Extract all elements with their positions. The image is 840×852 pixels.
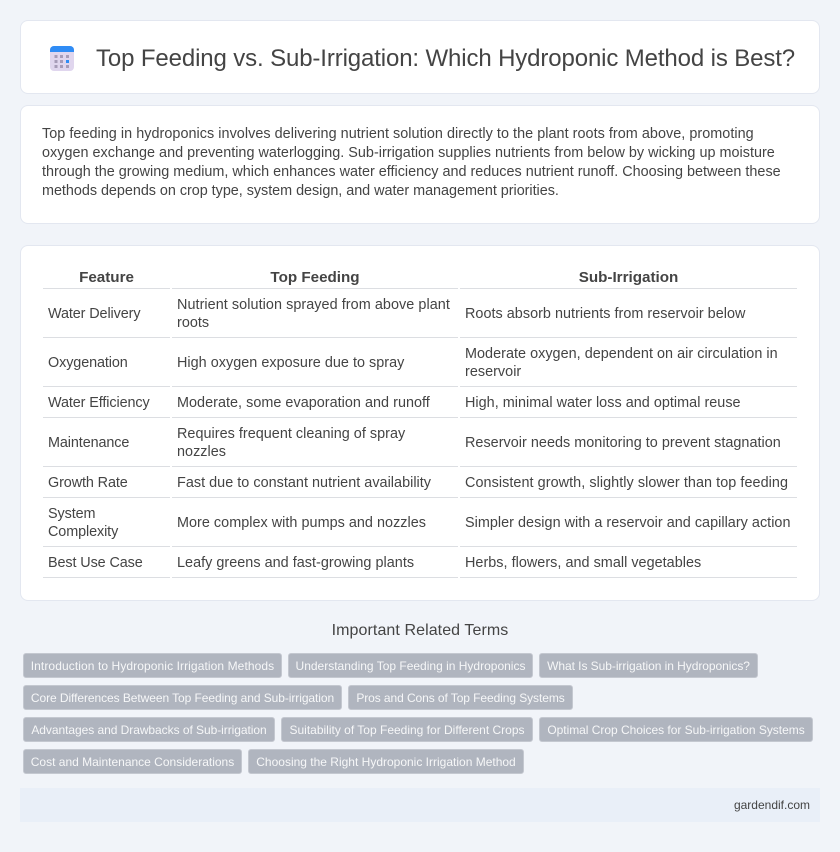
intro text: methods depends on crop type, system design, and water management priorities. xyxy=(42,183,559,199)
row: best use case: Best Use Case xyxy=(48,555,143,571)
row: maintenance: nozzles xyxy=(177,444,226,460)
row: water delivery: Water Delivery xyxy=(48,306,140,322)
related terms tags: Choosing the Right Hydroponic Irrigation Method xyxy=(256,755,516,769)
row: best use case: Leafy greens and fast-growing plants xyxy=(177,555,414,571)
related terms tags: Introduction to Hydroponic Irrigation Methods xyxy=(31,659,274,673)
intro text: through the growing medium, which enhances water efficiency and reduces nutrient runoff. Choosing between these xyxy=(42,164,781,180)
row: oxygenation xyxy=(48,346,778,380)
row: maintenance: Maintenance xyxy=(48,435,129,451)
comparison table xyxy=(43,269,797,578)
panel: comparison table xyxy=(20,245,820,601)
row: water delivery xyxy=(48,297,746,331)
row: water efficiency: Moderate, some evaporation and runoff xyxy=(177,395,430,411)
row: oxygenation: Oxygenation xyxy=(48,355,128,371)
related terms tags: Core Differences Between Top Feeding and Sub-irrigation xyxy=(31,691,334,705)
intro text: oxygen exchange and preventing waterlogging. Sub-irrigation supplies nutrients from below by wicking up moisture xyxy=(42,145,775,161)
row: best use case xyxy=(48,555,701,571)
related terms tags: Understanding Top Feeding in Hydroponics xyxy=(296,659,525,673)
row: water efficiency: Water Efficiency xyxy=(48,395,150,411)
row: system complexity: Simpler design with a reservoir and capillary action xyxy=(465,515,790,531)
row: water delivery: Nutrient solution sprayed from above plant xyxy=(177,297,450,313)
row: growth rate: Growth Rate xyxy=(48,475,128,491)
related terms tags xyxy=(23,653,813,774)
row: oxygenation: reservoir xyxy=(465,364,521,380)
row: water efficiency xyxy=(48,395,741,411)
header card xyxy=(20,20,820,94)
row: maintenance: Requires frequent cleaning of spray xyxy=(177,426,405,442)
row: best use case: Herbs, flowers, and small vegetables xyxy=(465,555,701,571)
row: maintenance: Reservoir needs monitoring to prevent stagnation xyxy=(465,435,781,451)
table header xyxy=(79,269,678,286)
row: system complexity xyxy=(48,506,790,540)
heading: related terms: Important Related Terms xyxy=(332,622,508,639)
title: Top Feeding vs. Sub-Irrigation: Which Hydroponic Method is Best? xyxy=(96,45,795,72)
panel: introduction xyxy=(20,105,820,224)
footer credit: gardendif.com xyxy=(734,798,810,812)
icon: calendar xyxy=(50,46,74,71)
related terms tags: Advantages and Drawbacks of Sub-irrigation xyxy=(31,723,267,737)
row: maintenance xyxy=(48,426,781,460)
table header: Top Feeding xyxy=(270,269,360,286)
row: growth rate xyxy=(48,475,788,491)
row: growth rate: Fast due to constant nutrient availability xyxy=(177,475,431,491)
row: oxygenation: High oxygen exposure due to spray xyxy=(177,355,404,371)
related terms tags: Suitability of Top Feeding for Different Crops xyxy=(289,723,524,737)
table header: Feature xyxy=(79,269,134,286)
table header: Sub-Irrigation xyxy=(579,269,678,286)
row: oxygenation: Moderate oxygen, dependent on air circulation in xyxy=(465,346,778,362)
row: water efficiency: High, minimal water loss and optimal reuse xyxy=(465,395,741,411)
row: system complexity: More complex with pumps and nozzles xyxy=(177,515,426,531)
intro text: Top feeding in hydroponics involves delivering nutrient solution directly to the plant roots from above, promoting xyxy=(42,126,754,142)
related terms tags: Optimal Crop Choices for Sub-irrigation Systems xyxy=(547,723,805,737)
footer xyxy=(20,788,820,822)
row: system complexity: System xyxy=(48,506,95,522)
row: growth rate: Consistent growth, slightly slower than top feeding xyxy=(465,475,788,491)
row: system complexity: Complexity xyxy=(48,524,118,540)
intro text xyxy=(42,126,781,199)
row: water delivery: Roots absorb nutrients from reservoir below xyxy=(465,306,745,322)
related terms tags: What Is Sub-irrigation in Hydroponics? xyxy=(547,659,750,673)
related terms tags: Pros and Cons of Top Feeding Systems xyxy=(356,691,565,705)
row: water delivery: roots xyxy=(177,315,209,331)
related terms tags: Cost and Maintenance Considerations xyxy=(31,755,234,769)
